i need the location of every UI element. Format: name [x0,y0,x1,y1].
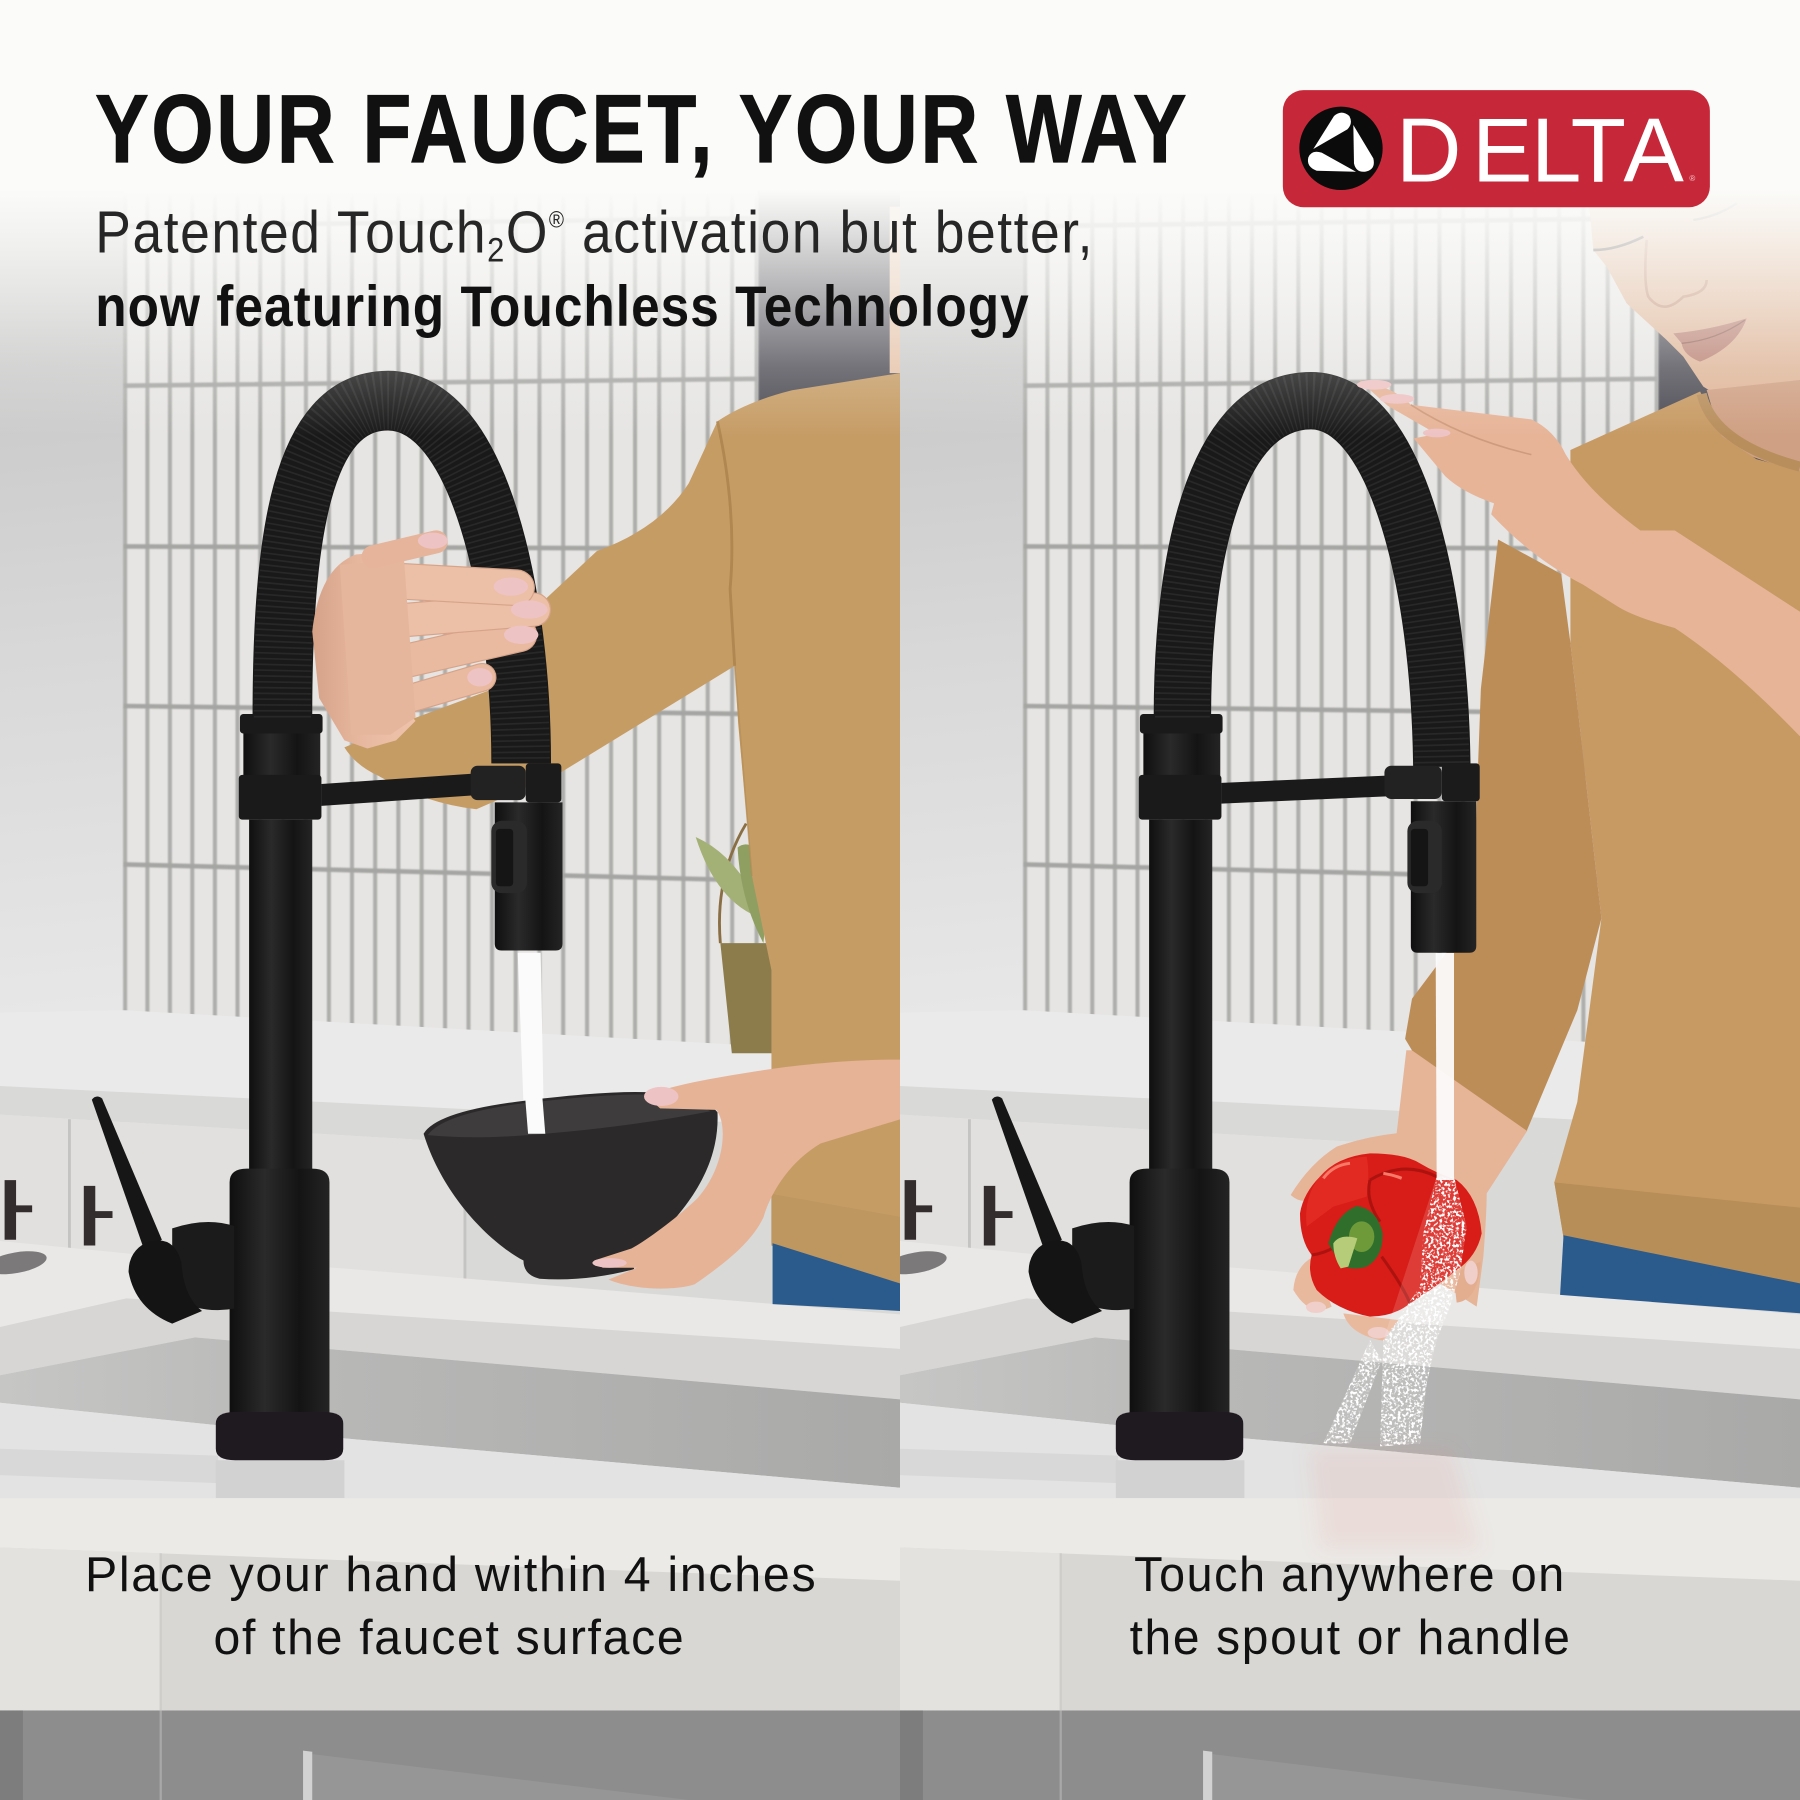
caption: right panel [1130,1547,1572,1665]
subtitle line one: Patented Touch [95,199,533,266]
white fade behind the header [0,0,1800,436]
panel: left photo, hand near faucet [0,202,900,1800]
logo emblem [1299,107,1383,190]
logo registered mark: ® [1689,174,1695,183]
red bell pepper [1300,1153,1482,1317]
caption: right panel: the spout or handle [1130,1610,1572,1665]
water stream into bowl [518,953,544,1134]
woman's neck and face [1580,157,1800,473]
sweater sleeve [1405,540,1601,1131]
jeans [773,1243,900,1311]
lower arm and cupped hand behind pepper [1291,1050,1527,1341]
subtitle line two: now featuring Touchless Technology [95,275,1030,339]
raised hand and forearm touching the spout [1357,380,1800,736]
hand holding bowl [592,1060,900,1289]
faucet spout, sprayer and rod [1182,401,1480,953]
kitchen background: wall, tiles, counters, cabinets and faucet base [884,0,1800,1800]
potted plant [696,824,775,1053]
black bowl [424,1092,718,1279]
jeans [1560,1235,1800,1313]
subtitle line one: 2 [487,232,506,270]
sweater: raised arm and torso [344,373,900,1283]
title: YOUR FAUCET, YOUR WAY [95,76,1189,183]
face edge at the panel border [890,207,900,373]
pink reflection of the pepper on the counter [1309,1449,1481,1550]
hand hovering near the spout [312,533,548,748]
caption: left panel [85,1547,817,1665]
caption: left panel: of the faucet surface [214,1610,685,1665]
panel: right photo, hand touching faucet [900,205,1800,1800]
subtitle line one: ® [549,206,566,232]
caption: right panel: Touch anywhere on [1134,1547,1566,1602]
water stream and splash [1323,953,1467,1447]
Delta logo [1283,90,1710,207]
logo wordmark: DELTA [1396,101,1684,202]
faucet spout, sprayer and rod [282,401,562,951]
caption: left panel: Place your hand within 4 inches [85,1547,817,1602]
sweater: torso and collar [1554,391,1800,1286]
kitchen background: wall, tiles, counters, cabinets and faucet base [0,0,900,1800]
pepper stem [1328,1206,1383,1269]
subtitle line one: O [506,199,549,266]
subtitle line one: activation but better, [566,199,1094,266]
